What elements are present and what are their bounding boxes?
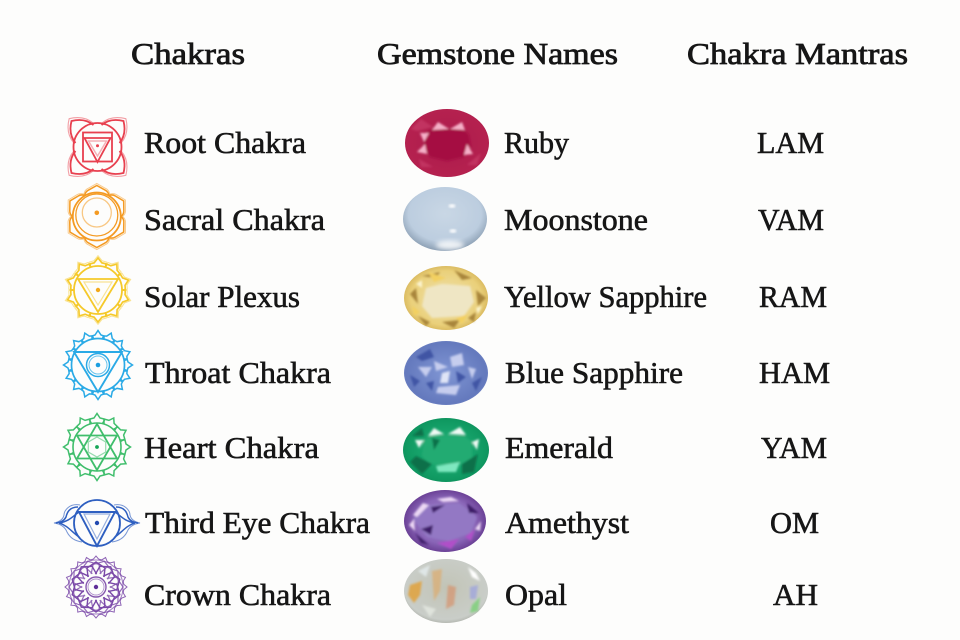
- gemstone: opal: [404, 559, 488, 623]
- icon: throat chakra: [64, 330, 132, 400]
- gemstone name: Moonstone: Moonstone: [504, 202, 648, 237]
- chakra name: Crown Chakra: Crown Chakra: [144, 577, 331, 612]
- gemstone: amethyst: [404, 490, 486, 552]
- chakra name: Sacral Chakra: Sacral Chakra: [144, 202, 325, 237]
- gemstone: emerald: [403, 418, 489, 482]
- gemstone name: Ruby: Ruby: [504, 125, 569, 160]
- chakra name: Heart Chakra: Heart Chakra: [144, 430, 319, 465]
- gemstone name: Amethyst: Amethyst: [505, 505, 629, 540]
- gemstone: ruby: [405, 109, 489, 177]
- mantra: OM: OM: [770, 505, 819, 540]
- mantra: AH: AH: [773, 577, 818, 612]
- chakra name: Throat Chakra: Throat Chakra: [145, 355, 331, 390]
- mantra: VAM: VAM: [758, 202, 824, 237]
- heading: Chakra Mantras: Chakra Mantras: [687, 36, 908, 71]
- mantra: HAM: HAM: [759, 355, 830, 390]
- gemstone: yellow sapphire: [404, 266, 488, 330]
- heading: Gemstone Names: Gemstone Names: [377, 36, 618, 71]
- mantra: LAM: LAM: [757, 125, 824, 160]
- icon: root chakra: [68, 118, 127, 176]
- chakra name: Solar Plexus: Solar Plexus: [144, 279, 300, 314]
- icon: crown chakra: [65, 556, 127, 618]
- heading: Chakras: Chakras: [131, 36, 245, 71]
- gemstone name: Yellow Sapphire: Yellow Sapphire: [504, 279, 707, 314]
- mantra: RAM: RAM: [759, 279, 827, 314]
- gemstone name: Emerald: Emerald: [505, 430, 614, 465]
- icon: third eye chakra: [54, 500, 140, 546]
- gemstone: moonstone: [403, 187, 487, 251]
- icon: sacral chakra: [62, 184, 132, 250]
- icon: solar plexus chakra: [63, 256, 133, 324]
- mantra: YAM: YAM: [761, 430, 827, 465]
- icon: heart chakra: [64, 414, 130, 480]
- gemstone: blue sapphire: [404, 341, 488, 405]
- gemstone name: Opal: Opal: [505, 577, 567, 612]
- chakra name: Root Chakra: Root Chakra: [144, 125, 306, 160]
- gemstone name: Blue Sapphire: Blue Sapphire: [505, 355, 683, 390]
- chakra name: Third Eye Chakra: Third Eye Chakra: [145, 505, 370, 540]
